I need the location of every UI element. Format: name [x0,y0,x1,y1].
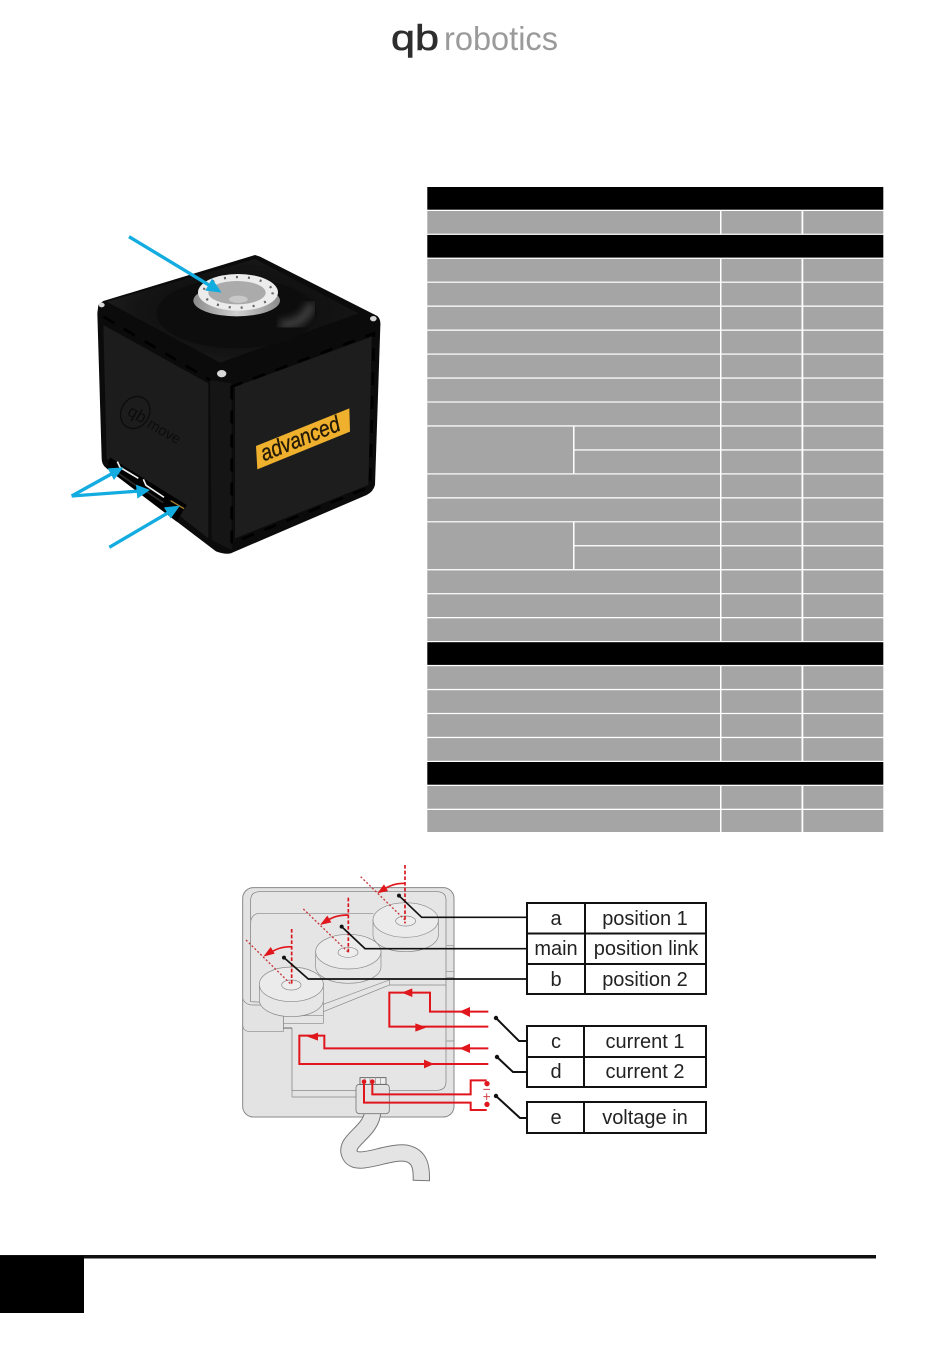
arrow to flange [129,237,222,293]
logo: qb robotics: qb [391,17,439,58]
pulley main [316,934,381,983]
label table: position sensors: b [550,969,562,991]
connector ports [107,457,187,522]
inner step line [251,913,454,1048]
section bar 2 [427,642,883,665]
label table: position sensors: position link [594,938,699,960]
label table: position sensors: main [534,938,578,960]
section 2 rows [427,666,883,761]
label table: position sensors: position 2 [602,969,688,991]
label table: currents: current 2 [606,1061,684,1083]
label table: currents: c [551,1031,561,1053]
label leaders c d e [494,1016,527,1118]
label table: currents: current 1 [606,1031,684,1053]
current wires loop 1 [389,988,488,1032]
corner screws [99,303,377,377]
cube body [97,255,380,554]
dish highlight [280,303,312,325]
top plate [107,259,358,363]
schematic: actuator top view with pulleys and wiring [243,865,527,1181]
section 3 rows [427,786,883,832]
label table: position sensors: position 1 [602,908,688,930]
left notch [243,998,356,1097]
voltage wires [362,1079,490,1110]
product photo: cube actuator with arrows [72,237,380,554]
left edge dashes [103,317,210,380]
embossed logo on left face: qb [124,401,150,427]
header bar [427,187,883,210]
label table: voltage [527,1102,706,1133]
cable [349,1112,421,1181]
pulley a [373,903,438,952]
current wires loop 2 [299,1033,488,1068]
leader lines to position labels [282,894,527,979]
pulley bracket [323,980,389,1012]
rotation axis main [303,898,348,952]
footer rule [0,1255,876,1258]
label table: currents [527,1026,706,1087]
logo: qb robotics: robotics [444,20,558,57]
specification table [427,187,883,832]
rotation axis a [361,865,405,923]
inner housing outline [251,892,446,1090]
logo: qb robotics [391,17,558,58]
header row [427,211,883,234]
arrow to first port [72,467,123,496]
face dashes [232,333,374,543]
embossed logo on left face: move [144,416,183,448]
embossed logo on left face [115,391,189,453]
label table: position sensors: a [550,908,562,930]
section bar 1 [427,235,883,258]
label table: position sensors [527,903,706,994]
section 1 rows [427,259,883,641]
front edge [210,380,232,550]
connector [356,1078,389,1114]
arrow to third port [109,506,180,547]
housing [243,888,454,1117]
label table: currents: d [550,1061,562,1083]
rotation axis b [246,929,292,985]
left face [103,325,208,538]
right face [235,337,372,538]
footer page-number block [0,1256,84,1313]
arrow to second port [72,485,150,499]
advanced badge: advanced [256,410,345,466]
label table: voltage: voltage in [602,1107,688,1129]
top dish [157,278,317,348]
section bar 3 [427,762,883,785]
output flange [193,274,280,316]
pulley b [259,967,323,1017]
label table: voltage: e [550,1107,562,1129]
